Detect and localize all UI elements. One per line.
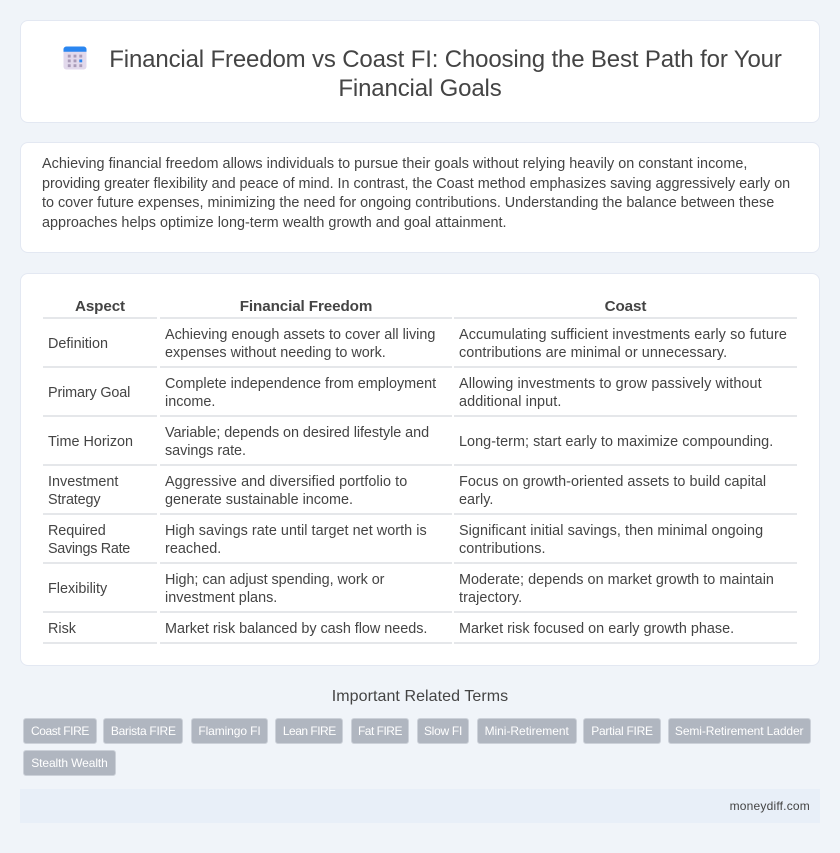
comparison table: savings rate.	[165, 443, 246, 459]
intro text: to cover future expenses, minimizing the need for ongoing contributions. Understanding the balance between these	[42, 195, 774, 211]
comparison table: Long-term; start early to maximize compounding.	[459, 434, 773, 450]
comparison table: trajectory.	[459, 590, 522, 606]
title: Financial Goals	[338, 75, 502, 102]
comparison table: Required	[48, 523, 106, 539]
related terms tags: Mini-Retirement	[485, 724, 569, 738]
comparison table: investment plans.	[165, 590, 277, 606]
comparison table: High savings rate until target net worth is	[165, 523, 427, 539]
comparison table: early.	[459, 492, 493, 508]
comparison table: Focus on growth-oriented assets to build capital	[459, 474, 766, 490]
intro text: providing greater flexibility and peace of mind. In contrast, the Coast method emphasizes saving aggressively early on	[42, 176, 790, 192]
comparison table: Coast	[605, 298, 646, 315]
related terms tags: Partial FIRE	[591, 724, 653, 738]
comparison table: contributions.	[459, 541, 546, 557]
comparison table: Aggressive and diversified portfolio to	[165, 474, 407, 490]
related terms tags: Fat FIRE	[358, 724, 402, 738]
comparison table: Aspect	[75, 298, 125, 315]
related terms tags: Flamingo FI	[198, 724, 261, 738]
title	[109, 46, 782, 102]
header card	[20, 20, 820, 123]
related terms tags: Lean FIRE	[283, 724, 336, 738]
intro text	[42, 156, 790, 231]
comparison table: Moderate; depends on market growth to maintain	[459, 572, 774, 588]
comparison table: Strategy	[48, 492, 100, 508]
related terms heading: Important Related Terms	[332, 688, 508, 705]
comparison table: Accumulating sufficient investments early so future	[459, 327, 787, 343]
comparison table: Market risk focused on early growth phase.	[459, 621, 734, 637]
related terms tags: Barista FIRE	[111, 724, 176, 738]
comparison table: Variable; depends on desired lifestyle and	[165, 425, 429, 441]
comparison table: Time Horizon	[48, 434, 133, 450]
comparison table: income.	[165, 394, 215, 410]
icon: calendar	[63, 46, 87, 70]
comparison table: contributions are minimal or unnecessary.	[459, 345, 727, 361]
related terms tags: Stealth Wealth	[31, 756, 108, 770]
comparison table: Financial Freedom	[240, 298, 372, 315]
comparison table panel	[20, 273, 820, 666]
comparison table: Definition	[48, 336, 108, 352]
related terms tags: Semi-Retirement Ladder	[675, 724, 803, 738]
comparison table: Achieving enough assets to cover all living	[165, 327, 435, 343]
title: Financial Freedom vs Coast FI: Choosing the Best Path for Your	[109, 46, 782, 73]
intro text: Achieving financial freedom allows individuals to pursue their goals without relying heavily on constant income,	[42, 156, 747, 172]
comparison table: Allowing investments to grow passively without	[459, 376, 762, 392]
comparison table: Market risk balanced by cash flow needs.	[165, 621, 427, 637]
comparison table: generate sustainable income.	[165, 492, 353, 508]
intro text: approaches helps optimize long-term wealth growth and goal attainment.	[42, 215, 507, 231]
comparison table: expenses without needing to work.	[165, 345, 386, 361]
footer source text: moneydiff.com	[730, 799, 810, 813]
related terms tags	[23, 718, 811, 776]
comparison table: Flexibility	[48, 581, 107, 597]
intro text panel	[20, 142, 820, 253]
comparison table: Investment	[48, 474, 118, 490]
comparison table: Risk	[48, 621, 76, 637]
comparison table: Significant initial savings, then minimal ongoing	[459, 523, 763, 539]
comparison table: additional input.	[459, 394, 561, 410]
related terms tags: Coast FIRE	[31, 724, 89, 738]
comparison table: Primary Goal	[48, 385, 130, 401]
comparison table: High; can adjust spending, work or	[165, 572, 384, 588]
related terms tags: Slow FI	[424, 724, 462, 738]
comparison table: Savings Rate	[48, 541, 130, 557]
comparison table: Complete independence from employment	[165, 376, 436, 392]
comparison table	[43, 298, 797, 644]
comparison table: reached.	[165, 541, 221, 557]
footer bar	[20, 789, 820, 823]
